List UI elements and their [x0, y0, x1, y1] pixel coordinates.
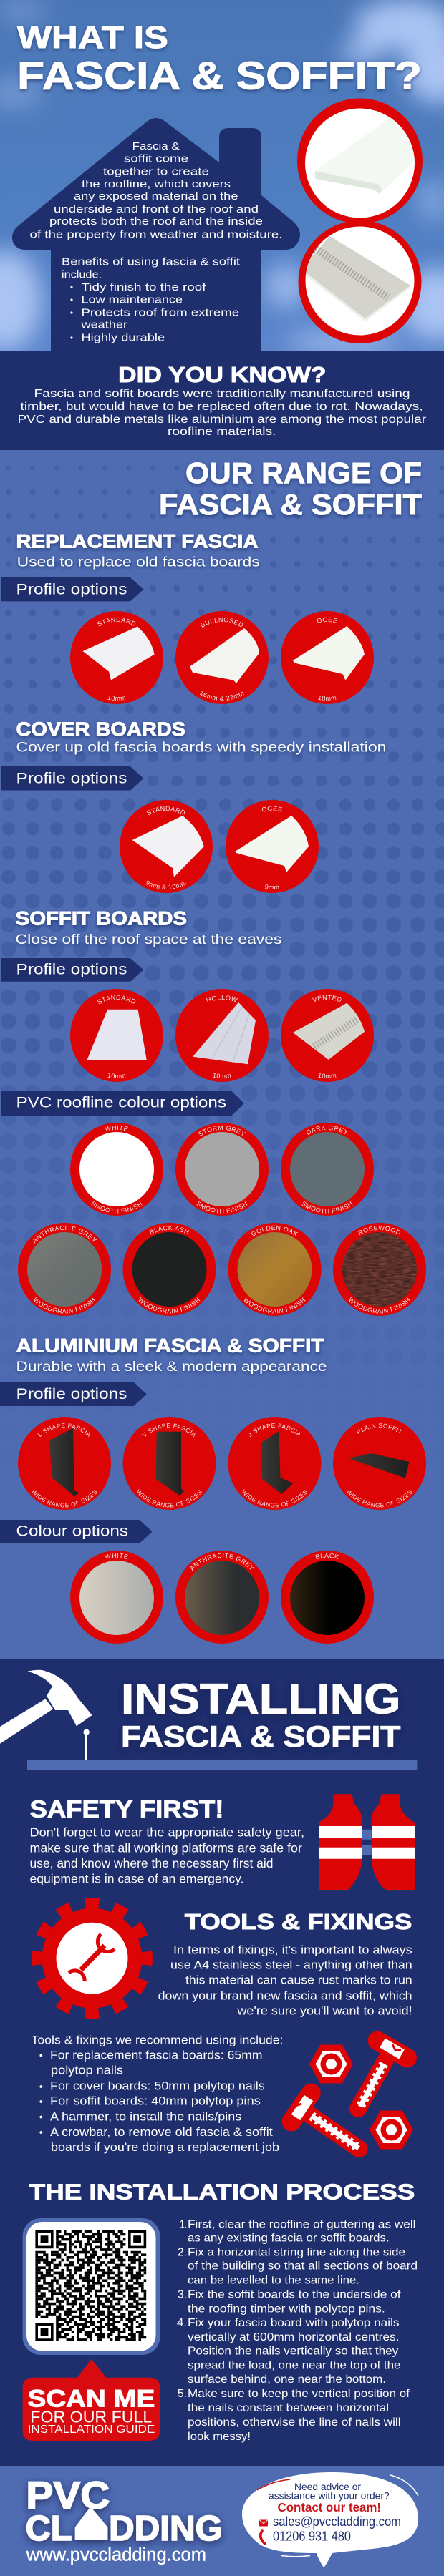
heading: cover boards: [16, 718, 387, 755]
intro text: underside and front of the roof and: [54, 204, 259, 215]
list: recommended tools and fixings: polytop nails: [51, 2064, 123, 2077]
text: safety advice: Don't forget to wear the appropriate safety gear,: [30, 1825, 304, 1840]
icon: soffit board in red ring: [298, 220, 421, 343]
benefits list: weather: [80, 320, 127, 331]
logo: pvc cladding: PVC: [26, 2474, 110, 2517]
swatch: anthracite grey: ANTHRACITE GREY: [33, 1225, 97, 1244]
speech bubble: contact details: 01206 931 480: [273, 2529, 351, 2544]
did you know text: roofline materials.: [168, 426, 276, 438]
benefits list: Low maintenance: [82, 295, 183, 306]
icon: gear with spanner: [37, 1904, 146, 2013]
profile: ogee cover board: OGEE: [262, 806, 282, 812]
profile: hollow soffit: HOLLOW: [206, 995, 238, 1002]
list: installation steps: 4.: [177, 2317, 187, 2329]
text: tools and fixings intro: this material can cause rust marks to run: [185, 1974, 412, 1987]
profile: standard fascia: [70, 611, 163, 704]
profile: j shape fascia: J SHAPE FASCIA: [248, 1423, 301, 1437]
swatch: aluminium anthracite grey: [175, 1551, 269, 1644]
profile: vented soffit: [281, 989, 374, 1082]
swatch: golden oak: [228, 1223, 321, 1316]
list: installation steps: spread the load, one near the top of the: [188, 2360, 401, 2372]
panel: range background with dots: [0, 450, 444, 1659]
intro text: any exposed material on the: [74, 191, 238, 203]
arrow label: profile options: Profile options: [16, 582, 127, 598]
intro text: Fascia &: [132, 141, 180, 152]
heading: our range: [159, 457, 422, 521]
heading: aluminium fascia and soffit: Durable with a sleek & modern appearance: [16, 1359, 327, 1375]
swatch: aluminium white: [70, 1551, 163, 1644]
swatch: black ash: BLACK ASH: [149, 1225, 189, 1235]
panel: did you know: [0, 351, 444, 450]
list: recommended tools and fixings: For replacement fascia boards: 65mm: [50, 2049, 262, 2062]
text: safety advice: make sure that all working platforms are safe for: [30, 1841, 302, 1855]
heading: soffit boards: Close off the roof space at the eaves: [16, 932, 282, 947]
profile: hollow soffit: [175, 989, 269, 1082]
heading: our range: OUR RANGE OF: [185, 457, 422, 489]
text: tools and fixings intro: we're sure you'll want to avoid!: [236, 2004, 412, 2018]
swatch: aluminium anthracite grey: ANTHRACITE GREY: [190, 1553, 255, 1571]
benefits list: include:: [62, 270, 102, 281]
list: installation steps: Fix your fascia board with polytop nails: [188, 2317, 400, 2329]
list: recommended tools and fixings: Tools & fixings we recommend using include:: [32, 2034, 284, 2047]
list: recommended tools and fixings: For cover boards: 50mm polytop nails: [50, 2079, 265, 2093]
list: installation steps: look messy!: [188, 2431, 251, 2443]
swatch: storm grey: STORM GREY: [198, 1125, 246, 1136]
text: tools and fixings intro: use A4 stainless steel - anything other than: [170, 1958, 412, 1972]
heading: cover boards: Cover up old fascia boards with speedy installation: [16, 739, 387, 755]
intro text: [30, 141, 282, 240]
did you know text: [17, 388, 426, 438]
profile: ogee fascia: 18mm: [318, 696, 337, 701]
list: recommended tools and fixings: For soffit boards: 40mm polytop pins: [50, 2094, 261, 2108]
profile: standard cover board: [120, 800, 213, 893]
profile: l shape fascia: WIDE RANGE OF SIZES: [32, 1489, 97, 1507]
intro text: together to create: [103, 166, 209, 177]
list: installation steps: as any existing fascia or soffit boards.: [188, 2233, 390, 2245]
panel: installing section background: [0, 1659, 444, 2466]
divider bar: [27, 1760, 417, 1770]
swatch: aluminium black: [281, 1551, 374, 1644]
swatch: dark grey: DARK GREY: [306, 1125, 349, 1135]
logo: pvc cladding: [26, 2474, 223, 2548]
heading: soffit boards: SOFFIT BOARDS: [16, 908, 187, 930]
arrow label: pvc roofline colour options: [1, 1091, 244, 1116]
profile: plain soffit: [333, 1417, 426, 1510]
list: recommended tools and fixings: [32, 2034, 284, 2154]
list: recommended tools and fixings: A hammer, to install the nails/pins: [50, 2109, 241, 2123]
speech bubble: contact details: sales@pvccladding.com: [273, 2514, 401, 2529]
arrow label: profile options: [1, 958, 143, 982]
list: installation steps: vertically at 600mm horizontal centres.: [188, 2331, 400, 2343]
heading: installing fascia and soffit: INSTALLING: [121, 1675, 401, 1722]
swatch: golden oak: WOODGRAIN FINISH: [243, 1297, 305, 1314]
swatch: white: WHITE: [105, 1125, 128, 1131]
list: installation steps: surface behind, one near the bottom.: [188, 2373, 386, 2386]
heading: tools and fixings: TOOLS & FIXINGS: [185, 1909, 412, 1934]
did you know text: timber, but would have to be replaced often due to rot. Nowadays,: [20, 401, 423, 413]
heading: replacement fascia: REPLACEMENT FASCIA: [16, 531, 259, 552]
list: installation steps: positions, otherwise the line of nails will: [188, 2416, 401, 2429]
arrow label: profile options: [1, 577, 143, 601]
text: tools and fixings intro: down your brand new fascia and soffit, which: [158, 1989, 412, 2002]
speech bubble: contact details: Contact our team!: [278, 2500, 381, 2514]
list: installation steps: can be levelled to the same line.: [188, 2275, 359, 2287]
swatch: rosewood: WOODGRAIN FINISH: [349, 1297, 410, 1314]
profile: v shape fascia: WIDE RANGE OF SIZES: [137, 1489, 202, 1507]
text: tools and fixings intro: [158, 1943, 412, 2018]
swatch: dark grey: [281, 1123, 374, 1216]
swatch: white: SMOOTH FINISH: [92, 1201, 142, 1214]
list: installation steps: the nails constant between horizontal: [188, 2402, 389, 2414]
callout: scan me: INSTALLATION GUIDE: [28, 2424, 155, 2436]
icon: nuts and bolts: [291, 2041, 412, 2149]
heading: the installation process: THE INSTALLATION PROCESS: [29, 2179, 415, 2204]
profile: standard soffit: [70, 989, 163, 1082]
arrow label: pvc roofline colour options: PVC roofline colour options: [16, 1095, 226, 1111]
title: [17, 20, 422, 97]
swatch: dark grey: SMOOTH FINISH: [302, 1201, 352, 1214]
text: safety advice: use, and know where the necessary first aid: [30, 1856, 274, 1870]
icon: mail: [259, 2520, 268, 2526]
profile: bullnosed fascia: [175, 611, 269, 704]
swatch: anthracite grey: WOODGRAIN FINISH: [34, 1297, 95, 1314]
profile: ogee cover board: [226, 800, 319, 893]
swatch: golden oak: GOLDEN OAK: [251, 1225, 298, 1236]
profile: l shape fascia: [18, 1417, 111, 1510]
benefits list: Tidy finish to the roof: [82, 282, 207, 293]
list: recommended tools and fixings: boards if you're doing a replacement job: [51, 2140, 279, 2154]
swatch: storm grey: SMOOTH FINISH: [196, 1201, 248, 1214]
heading: cover boards: COVER BOARDS: [16, 718, 185, 740]
profile: vented soffit: VENTED: [312, 995, 342, 1002]
did you know text: Fascia and soffit boards were traditionally manufactured using: [34, 388, 410, 400]
heading: aluminium fascia and soffit: [16, 1335, 327, 1375]
profile: l shape fascia: L SHAPE FASCIA: [37, 1423, 90, 1437]
list: installation steps: Fix the soffit boards to the underside of: [188, 2289, 401, 2301]
speech bubble: contact details: [242, 2472, 418, 2567]
benefits list: Protects roof from extreme: [82, 308, 239, 319]
swatch: rosewood: ROSEWOOD: [358, 1225, 400, 1235]
swatch: aluminium black: BLACK: [314, 1552, 340, 1561]
title: FASCIA & SOFFIT?: [17, 53, 422, 97]
profile: v shape fascia: V SHAPE FASCIA: [142, 1423, 196, 1437]
text: safety advice: [30, 1825, 304, 1885]
benefits list: Benefits of using fascia & soffit: [62, 256, 240, 268]
list: installation steps: [177, 2218, 418, 2443]
profile: bullnosed fascia: 16mm & 22mm: [200, 691, 244, 701]
text: tools and fixings intro: In terms of fixings, it's important to always: [173, 1943, 412, 1957]
profile: standard soffit: STANDARD: [97, 995, 136, 1004]
logo: pvc cladding: DDING: [109, 2509, 223, 2548]
profile: ogee fascia: [281, 611, 374, 704]
swatch: anthracite grey: [18, 1223, 111, 1316]
panel: house with introduction: [12, 118, 300, 351]
profile: vented soffit: 10mm: [318, 1073, 337, 1079]
icon: safety vest: [319, 1794, 415, 1890]
arrow label: colour options: Colour options: [16, 1523, 128, 1540]
panel: sky background: [0, 0, 444, 355]
swatch: white: [70, 1123, 163, 1216]
arrow label: profile options: Profile options: [16, 962, 127, 978]
swatch: black ash: [123, 1223, 216, 1316]
arrow label: profile options: [1, 766, 143, 790]
speech bubble: contact details: Need advice or: [294, 2482, 362, 2492]
profile: plain soffit: WIDE RANGE OF SIZES: [347, 1489, 412, 1507]
list: installation steps: First, clear the roofline of guttering as well: [188, 2218, 415, 2230]
logo: pvc cladding: CL: [26, 2509, 72, 2548]
arrow label: profile options: Profile options: [16, 770, 127, 787]
callout: scan me: [23, 2359, 160, 2441]
profile: ogee fascia: OGEE: [317, 617, 338, 623]
panel: footer background: [0, 2466, 444, 2576]
icon: hammer and nail: [0, 1670, 92, 1761]
profile: standard cover board: STANDARD: [147, 806, 185, 815]
website address: www.pvccladding.com: [26, 2543, 206, 2565]
list: installation steps: 5.: [178, 2388, 187, 2400]
list: installation steps: 3.: [178, 2289, 187, 2301]
icon: phone: [261, 2531, 265, 2544]
heading: replacement fascia: Used to replace old fascia boards: [17, 554, 260, 570]
heading: replacement fascia: [16, 531, 260, 570]
arrow label: profile options: [0, 1382, 147, 1406]
list: installation steps: of the building so that all sections of board: [188, 2260, 418, 2273]
swatch: storm grey: [175, 1123, 269, 1216]
list: installation steps: Fix a horizontal string line along the side: [188, 2246, 405, 2258]
list: installation steps: 2.: [178, 2246, 187, 2258]
list: installation steps: Position the nails vertically so that they: [188, 2346, 398, 2358]
icon: fascia board in red ring: [297, 99, 423, 223]
profile: v shape fascia: [123, 1417, 216, 1510]
profile: j shape fascia: WIDE RANGE OF SIZES: [242, 1489, 307, 1507]
arrow label: colour options: [0, 1520, 153, 1543]
heading: installing fascia and soffit: [121, 1675, 401, 1753]
intro text: protects both the roof and the inside: [49, 216, 263, 228]
heading: our range: FASCIA & SOFFIT: [159, 488, 422, 521]
profile: j shape fascia: [228, 1417, 321, 1510]
profile: standard soffit: 10mm: [107, 1073, 126, 1079]
speech bubble: contact details: assistance with your order?: [269, 2491, 390, 2502]
heading: aluminium fascia and soffit: ALUMINIUM FASCIA & SOFFIT: [16, 1335, 324, 1356]
callout: scan me: FOR OUR FULL: [30, 2408, 153, 2426]
profile: standard fascia: STANDARD: [97, 617, 136, 626]
benefits list: Highly durable: [82, 332, 165, 343]
benefits list: [62, 256, 240, 343]
title: WHAT IS: [17, 20, 168, 55]
swatch: black ash: WOODGRAIN FINISH: [139, 1297, 201, 1314]
profile: ogee cover board: 9mm: [265, 884, 279, 889]
QR code panel: [23, 2218, 160, 2355]
profile: bullnosed fascia: BULLNOSED: [201, 617, 243, 628]
heading: installing fascia and soffit: FASCIA & SOFFIT: [121, 1719, 401, 1753]
list: installation steps: the roofing timber with polytop pins.: [188, 2303, 385, 2316]
text: safety advice: equipment is in case of an emergency.: [30, 1871, 243, 1885]
heading: safety first: SAFETY FIRST!: [30, 1795, 223, 1822]
list: recommended tools and fixings: A crowbar, to remove old fascia & soffit: [50, 2125, 273, 2139]
profile: hollow soffit: 10mm: [213, 1073, 231, 1079]
heading: soffit boards: [16, 908, 282, 947]
did you know heading: DID YOU KNOW?: [118, 362, 327, 387]
profile: plain soffit: PLAIN SOFFIT: [357, 1423, 402, 1434]
intro text: soffit come: [124, 154, 188, 165]
arrow label: profile options: Profile options: [16, 1386, 127, 1402]
intro text: of the property from weather and moisture.: [30, 229, 282, 240]
profile: standard cover board: 9mm & 10mm: [146, 880, 186, 889]
list: installation steps: 1.: [180, 2218, 187, 2230]
intro text: the roofline, which covers: [82, 179, 231, 190]
swatch: rosewood: [333, 1223, 426, 1316]
swatch: aluminium white: WHITE: [105, 1553, 128, 1559]
callout: scan me: SCAN ME: [28, 2385, 155, 2412]
profile: standard fascia: 18mm: [107, 696, 126, 701]
did you know text: PVC and durable metals like aluminium are among the most popular: [17, 414, 426, 426]
list: installation steps: Make sure to keep the vertical position of: [188, 2388, 410, 2400]
